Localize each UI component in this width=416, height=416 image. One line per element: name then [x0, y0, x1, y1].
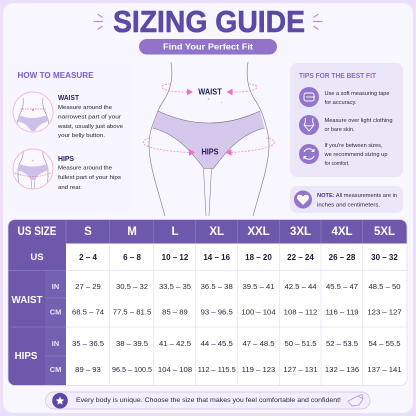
- text: hips: and rear.: [58, 185, 82, 191]
- row: hips centimeters: CM: [50, 365, 61, 374]
- row: US sizes: 2 – 4: [79, 253, 97, 262]
- text: tip 2: [324, 118, 392, 133]
- heading: tips: TIPS FOR THE BEST FIT: [299, 71, 376, 80]
- row: US sizes: [30, 252, 398, 263]
- row label: waist: WAIST: [11, 295, 43, 306]
- row: hips inches: IN: [52, 339, 59, 348]
- text: waist: narrowest part of your: [58, 114, 121, 120]
- table header row: 4XL: [331, 226, 353, 238]
- row: waist inches: IN: [52, 282, 59, 291]
- row: hips centimeters: 104 – 108: [158, 365, 192, 374]
- row: hips inches: 47 – 48.5: [242, 339, 275, 348]
- callout: note: inches and centimeters.: [317, 202, 380, 208]
- table header row: [18, 226, 395, 238]
- row: hips inches: 44 – 45.5: [201, 339, 233, 348]
- row: waist centimeters: CM: [50, 308, 61, 316]
- row: waist centimeters: 100 – 104: [241, 308, 276, 316]
- text: tip 1: Use a soft measuring tape: [324, 91, 390, 97]
- row: waist centimeters: [50, 308, 402, 316]
- row: US sizes: 30 – 32: [371, 253, 398, 262]
- icon: measuring tape: [299, 87, 319, 107]
- row: waist centimeters: 93 – 96.5: [201, 308, 233, 316]
- row: US sizes: 10 – 12: [162, 253, 189, 262]
- arrow: waist right: [226, 84, 257, 95]
- arrow: hips left: [143, 138, 195, 156]
- row: US sizes: US: [30, 252, 44, 263]
- row: waist inches: 33.5 – 35: [159, 282, 191, 291]
- text: tip 2: or bare skin.: [324, 127, 355, 133]
- text: tip 2: Measure over light clothing: [324, 118, 392, 124]
- callout: note: NOTE: All measurements are in: [317, 193, 397, 199]
- row: hips centimeters: 137 – 141: [367, 365, 402, 374]
- row: hips centimeters: 96.5 – 100.5: [112, 365, 152, 374]
- table header row: M: [127, 226, 137, 238]
- icon: clothing: [299, 115, 319, 135]
- row: US sizes: 6 – 8: [123, 253, 141, 262]
- text: tip 1: for accuracy.: [324, 100, 357, 106]
- row: hips inches: 50 – 51.5: [284, 339, 317, 348]
- text: waist: your belly button.: [58, 133, 105, 139]
- row: waist centimeters: 85 – 89: [162, 308, 188, 316]
- text: tip 1: [324, 91, 390, 106]
- row: hips inches: 35 – 36.5: [72, 339, 104, 348]
- text: hips: [58, 154, 121, 191]
- row: waist inches: 45.5 – 47: [326, 282, 358, 291]
- row: hips inches: 38 – 39.5: [116, 339, 148, 348]
- arrow: hips right: [226, 138, 274, 156]
- icon: size up arrows: [299, 144, 319, 164]
- row: hips centimeters: 127 – 131: [283, 365, 318, 374]
- text: tip 3: we recommend sizing up: [323, 152, 388, 158]
- table header row: US SIZE: [18, 226, 57, 238]
- text: hips: fullest part of your hips: [58, 175, 121, 181]
- row: hips centimeters: 89 – 93: [75, 365, 101, 374]
- text: waist: Measure around the: [58, 105, 113, 111]
- row: US sizes: 14 – 16: [203, 253, 231, 262]
- text: waist: [57, 93, 124, 139]
- row: waist centimeters: 68.5 – 74: [72, 308, 105, 316]
- row: US sizes: 18 – 20: [245, 253, 272, 262]
- table header row: XXL: [247, 226, 270, 238]
- row: hips centimeters: 132 – 136: [325, 365, 359, 374]
- row: US sizes: 26 – 28: [329, 253, 356, 262]
- subtitle pill: [139, 39, 277, 54]
- row: hips centimeters: 112 – 115.5: [198, 365, 236, 374]
- panel: tips: [290, 63, 403, 177]
- text: tip 3: If you're between sizes,: [324, 143, 383, 149]
- row: hips inches: 41 – 42.5: [159, 339, 191, 348]
- text: hips: HIPS: [58, 154, 74, 163]
- row: US sizes: 22 – 24: [287, 253, 314, 262]
- row: waist centimeters: 123 – 127: [367, 308, 402, 316]
- callout: note: [290, 186, 403, 213]
- row: hips centimeters: [50, 365, 402, 374]
- row: waist inches: 27 – 29: [75, 282, 101, 291]
- text: waist: WAIST: [58, 93, 80, 102]
- table header row: S: [84, 226, 92, 238]
- row: waist inches: 48.5 – 50: [368, 282, 401, 291]
- panel: how to measure: [12, 72, 123, 190]
- footer message: [46, 392, 370, 409]
- icon: star: [52, 393, 68, 409]
- icon: waist diagram: [13, 92, 53, 134]
- icon: measuring tape: [348, 394, 363, 406]
- table header row: XL: [209, 226, 224, 238]
- row: hips centimeters: 119 – 123: [242, 365, 275, 374]
- row: waist centimeters: 108 – 112: [284, 308, 317, 316]
- body diagram: [143, 62, 274, 216]
- heading: how to measure: HOW TO MEASURE: [18, 71, 94, 80]
- row: waist inches: [52, 282, 401, 291]
- row: waist inches: 39.5 – 41: [242, 282, 275, 291]
- table header row: L: [171, 226, 179, 238]
- table header row: 5XL: [374, 226, 395, 238]
- row: waist centimeters: 77.5 – 81.5: [113, 308, 151, 316]
- briefs: [152, 111, 264, 168]
- row: waist inches: 42.5 – 44: [284, 282, 317, 291]
- footer message: Every body is unique. Choose the size that makes you feel comfortable and confident!: [76, 397, 341, 404]
- row label: hips: HIPS: [15, 351, 38, 362]
- text: hips: Measure around the: [58, 166, 113, 172]
- text: waist: waist, usually just above: [57, 124, 124, 130]
- table header row: 3XL: [290, 226, 311, 238]
- label: hips: HIPS: [202, 148, 218, 156]
- title: SIZING GUIDE: [113, 4, 305, 39]
- size table: [8, 220, 407, 386]
- label: waist: WAIST: [198, 88, 222, 96]
- text: tip 3: [323, 143, 388, 167]
- text: tip 3: for comfort.: [324, 161, 350, 167]
- row: waist centimeters: 116 – 119: [325, 308, 359, 316]
- row: hips inches: 52 – 53.5: [326, 339, 358, 348]
- row: waist inches: 36.5 – 38: [201, 282, 233, 291]
- row: hips inches: [52, 339, 401, 348]
- row: hips inches: 54 – 55.5: [368, 339, 401, 348]
- icon: hips diagram: [13, 149, 53, 192]
- subtitle pill: Find Your Perfect Fit: [163, 42, 253, 51]
- arrow: waist left: [162, 84, 193, 95]
- row: waist inches: 30.5 – 32: [116, 282, 148, 291]
